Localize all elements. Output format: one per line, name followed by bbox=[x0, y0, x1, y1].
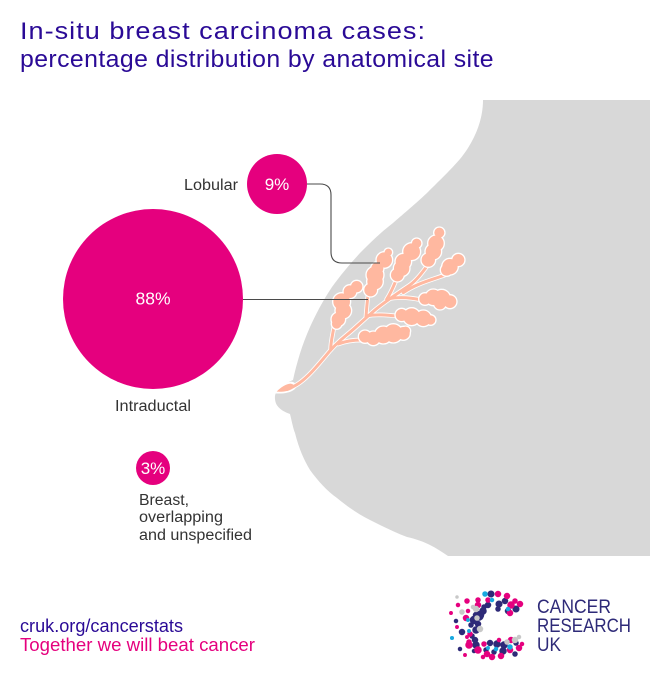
label: breast, overlapping and unspecified: overlapping bbox=[139, 509, 223, 526]
bubble: lobular 9%: 9% bbox=[265, 175, 289, 194]
label: lobular: Lobular bbox=[184, 177, 238, 194]
logo: wordmark: UK bbox=[537, 634, 561, 656]
logo: cancer research uk bbox=[450, 591, 631, 660]
connector: lobular bbox=[307, 184, 380, 263]
label: breast, overlapping and unspecified: Breast, bbox=[139, 492, 189, 509]
label: breast, overlapping and unspecified: and unspecified bbox=[139, 527, 252, 544]
bubble: lobular 9% bbox=[247, 154, 307, 214]
logo: wordmark bbox=[537, 596, 631, 656]
logo: dotted C mark bbox=[450, 591, 524, 660]
nipple duct end bbox=[277, 384, 294, 392]
lobules outline bbox=[333, 229, 463, 344]
title: percentage distribution by anatomical site bbox=[20, 46, 494, 73]
bubble: intraductal 88%: 88% bbox=[135, 288, 171, 308]
lobules bbox=[333, 229, 463, 344]
footer link: cruk.org/cancerstats bbox=[20, 616, 183, 636]
label: breast, overlapping and unspecified bbox=[139, 492, 252, 544]
logo: wordmark: CANCER bbox=[537, 596, 611, 618]
connector: intraductal bbox=[243, 298, 368, 300]
footer tagline: Together we will beat cancer bbox=[20, 635, 255, 655]
bubble: unspecified 3% bbox=[136, 451, 170, 485]
nipple duct end outline bbox=[275, 382, 296, 394]
label: intraductal: Intraductal bbox=[115, 398, 191, 415]
title: In-situ breast carcinoma cases: bbox=[20, 18, 426, 45]
bubble: unspecified 3%: 3% bbox=[141, 459, 165, 478]
peach ducts bbox=[291, 267, 445, 388]
white outline of ducts bbox=[291, 267, 445, 388]
logo: wordmark: RESEARCH bbox=[537, 615, 631, 637]
bubble: intraductal 88% bbox=[63, 209, 243, 389]
title bbox=[20, 18, 494, 73]
ducts and lobules illustration bbox=[275, 229, 463, 394]
breast silhouette bbox=[275, 100, 650, 556]
